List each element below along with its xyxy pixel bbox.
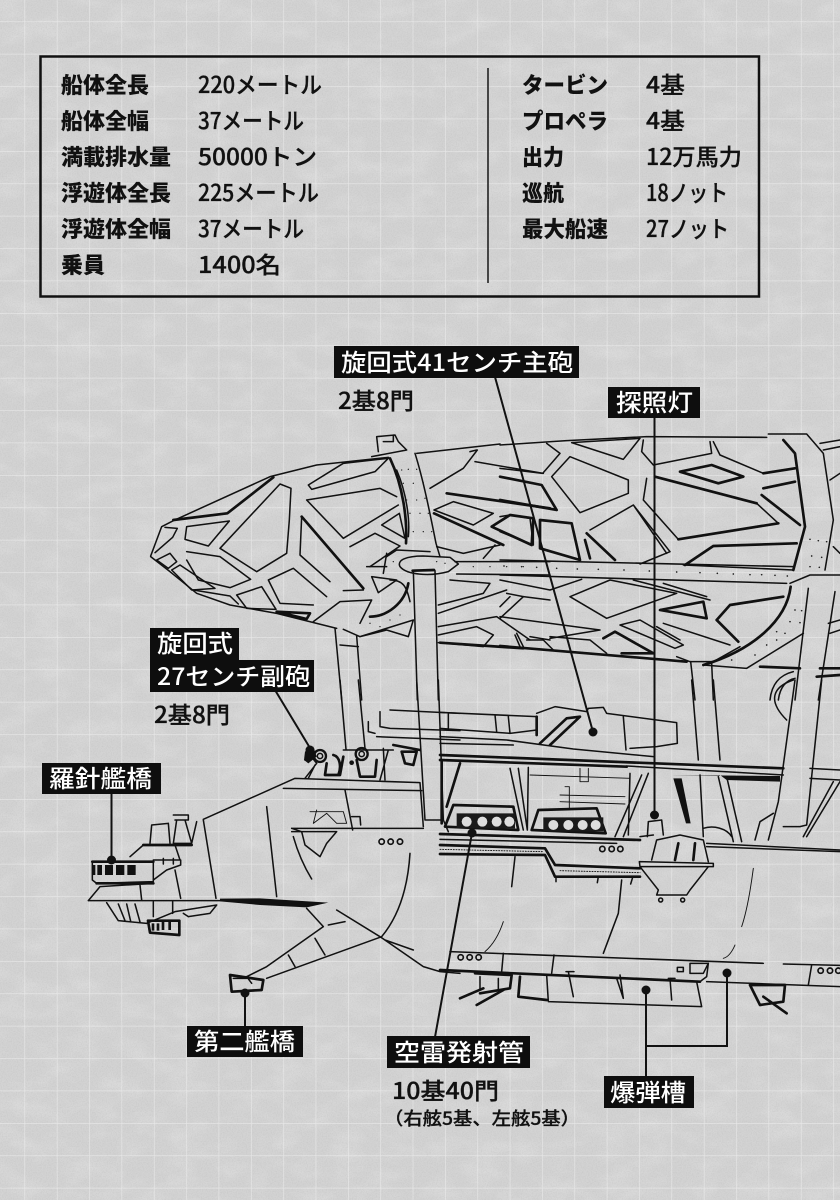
text: left values — [198, 66, 322, 280]
text: secondary gun count: 2基8門 — [154, 696, 230, 730]
main gun turret — [440, 707, 677, 757]
illustration: floating body left half — [151, 435, 550, 700]
text: right values: 12万馬力 — [646, 138, 742, 172]
label: bomb bay: 爆弾槽 — [610, 1073, 686, 1108]
secondary gun turrets — [304, 680, 420, 780]
text: left labels: 浮遊体全幅 — [61, 212, 171, 244]
text: right values: 18ノット — [646, 174, 728, 208]
illustration: main deck, main gun turret, torpedo tubes, searchlight and lower hull — [440, 680, 840, 1013]
label: rotating 27cm secondary gun: 旋回式 — [157, 624, 233, 659]
text: left values: 50000トン — [198, 138, 317, 172]
label: compass bridge — [42, 759, 161, 864]
text: right labels: タービン — [522, 68, 608, 100]
label: searchlight — [608, 383, 700, 820]
aerial torpedo tubes — [445, 805, 606, 833]
text: left values: 1400名 — [198, 246, 281, 280]
label: rotating 41cm main gun: 旋回式41センチ主砲 — [341, 343, 573, 378]
label: second bridge — [187, 988, 303, 1057]
text: port and starboard split: （右舷5基、左舷5基） — [384, 1105, 580, 1131]
text: left labels: 満載排水量 — [61, 140, 171, 172]
text: left labels: 船体全長 — [61, 68, 149, 100]
band — [390, 458, 406, 543]
text: right labels — [522, 68, 608, 244]
text: right values: 27ノット — [646, 210, 729, 244]
text: right values — [646, 66, 742, 244]
panel: specifications table — [40, 56, 759, 296]
label: searchlight: 探照灯 — [616, 383, 693, 418]
label: bomb bay — [604, 968, 732, 1108]
text: main gun count: 2基8門 — [338, 382, 414, 416]
compass bridge — [88, 815, 220, 935]
text: right labels: 巡航 — [522, 176, 564, 208]
text: left values: 225メートル — [198, 174, 319, 208]
label: rotating 41cm main gun — [334, 343, 598, 736]
text: left labels: 浮遊体全長 — [61, 176, 171, 208]
text: right labels: 最大船速 — [522, 212, 608, 244]
text: torpedo tube count: 10基40門 — [392, 1072, 499, 1106]
gondola searchlight sponson — [639, 820, 713, 895]
lower hull — [450, 952, 840, 965]
label: compass bridge: 羅針艦橋 — [49, 759, 152, 794]
text: right values: 4基 — [646, 66, 685, 100]
illustration: forward hull, bridges and secondary guns — [88, 680, 460, 992]
label: aerial torpedo tubes: 空雷発射管 — [394, 1033, 524, 1068]
text: right values: 4基 — [646, 102, 685, 136]
text: right labels: プロペラ — [522, 104, 608, 136]
label: rotating 27cm secondary gun — [150, 624, 314, 754]
text: left labels: 乗員 — [61, 248, 105, 280]
text: left values: 37メートル — [198, 102, 304, 136]
illustration: floating body right half — [500, 434, 840, 700]
label: second bridge: 第二艦橋 — [194, 1022, 295, 1057]
label: rotating 27cm secondary gun: 27センチ副砲 — [157, 657, 310, 692]
rivets — [369, 469, 524, 627]
text: left values: 37メートル — [198, 210, 304, 244]
text: left labels: 船体全幅 — [61, 104, 149, 136]
text: left values: 220メートル — [198, 66, 322, 100]
text: right labels: 出力 — [522, 140, 564, 172]
text: left labels — [61, 68, 171, 280]
label: aerial torpedo tubes — [387, 828, 530, 1068]
